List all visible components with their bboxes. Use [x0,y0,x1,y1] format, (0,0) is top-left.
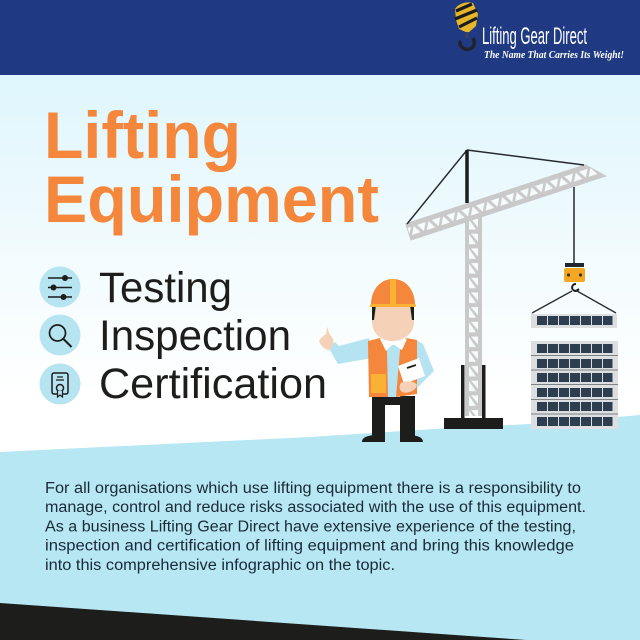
intro paragraph [45,480,586,574]
icon: sliders [40,266,80,308]
lifted concrete panel [531,314,617,328]
intro paragraph: manage, control and reduce risks associated with the use of this equipment. [45,499,586,516]
worker hard hat [370,279,416,307]
worker shirt and arms [328,338,434,397]
label: Testing: Testing [99,264,232,312]
label: Inspection: Inspection [99,312,291,360]
crane mast [465,217,482,416]
icon: crane hook logo [455,2,478,49]
worker hand pointing [319,327,333,350]
icon: magnifier [40,314,80,356]
crane base [444,365,503,429]
title: Lifting [44,98,241,172]
intro paragraph: For all organisations which use lifting equipment there is a responsibility to [45,480,581,497]
worker clipboard [398,358,425,393]
black corner wedge [0,603,526,640]
worker legs and shoes [362,396,423,442]
header bar [0,0,640,75]
worker head [372,305,414,341]
background sky [0,75,640,475]
worker hair [372,305,414,320]
icon: certificate [40,364,80,404]
worker figure [319,279,434,442]
intro paragraph: As a business Lifting Gear Direct have extensive experience of the testing, [45,518,576,536]
intro paragraph: inspection and certification of lifting equipment and bring this knowledge [45,538,574,554]
crane hook block [532,263,616,313]
label: Certification: Certification [99,360,327,408]
title [44,98,379,236]
crane jib [406,160,606,240]
building [531,341,618,429]
list: services [40,264,327,408]
ground band [0,415,640,640]
title: Equipment [44,162,379,236]
logo [455,2,624,61]
intro paragraph: into this comprehensive infographic on the topic. [45,557,395,574]
crane [406,150,618,429]
crane cables [407,150,584,264]
logo tagline: The Name That Carries Its Weight! [484,50,624,61]
worker orange vest [368,338,417,397]
